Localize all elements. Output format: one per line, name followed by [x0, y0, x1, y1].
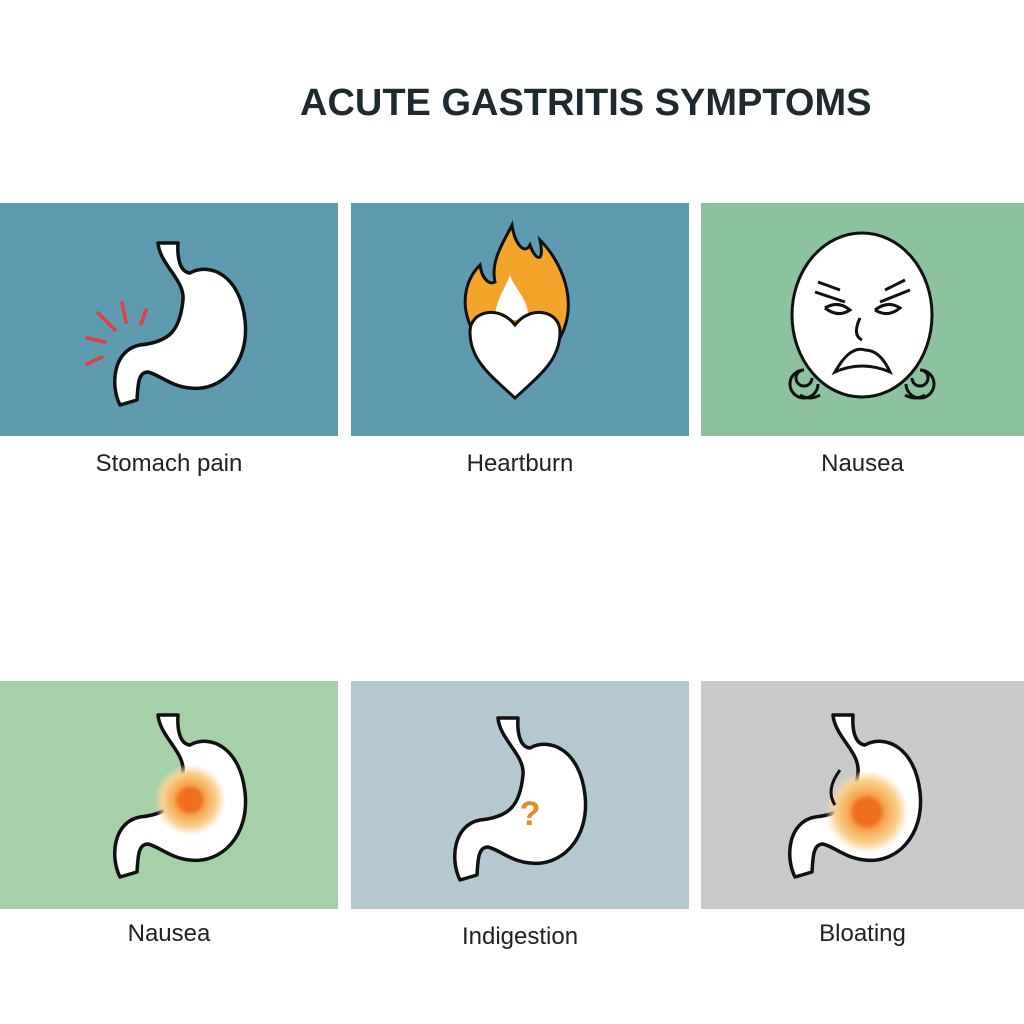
icon: stomach with pain lines — [87, 243, 246, 405]
icon: stomach with question — [455, 718, 586, 880]
icon: flaming heart — [465, 225, 568, 398]
panel: indigestion — [351, 681, 689, 909]
label: indigestion: Indigestion — [462, 923, 578, 950]
label: bloating: Bloating — [819, 920, 906, 947]
title: ACUTE GASTRITIS SYMPTOMS — [300, 82, 871, 124]
panel: nausea 2 — [0, 681, 338, 909]
label: nausea 2: Nausea — [128, 920, 210, 947]
panel: bloating — [701, 681, 1024, 909]
panel: nausea — [701, 203, 1024, 436]
icon: stomach with glow — [115, 715, 246, 877]
panel: stomach pain — [0, 203, 338, 436]
label: heartburn: Heartburn — [467, 450, 573, 477]
icon: stomach with question: ? — [520, 795, 540, 833]
icon: nauseous face — [790, 233, 934, 398]
icon: bloated stomach — [790, 715, 921, 877]
panel: heartburn — [351, 203, 689, 436]
label: nausea: Nausea — [821, 450, 904, 477]
label: stomach pain: Stomach pain — [96, 450, 242, 477]
